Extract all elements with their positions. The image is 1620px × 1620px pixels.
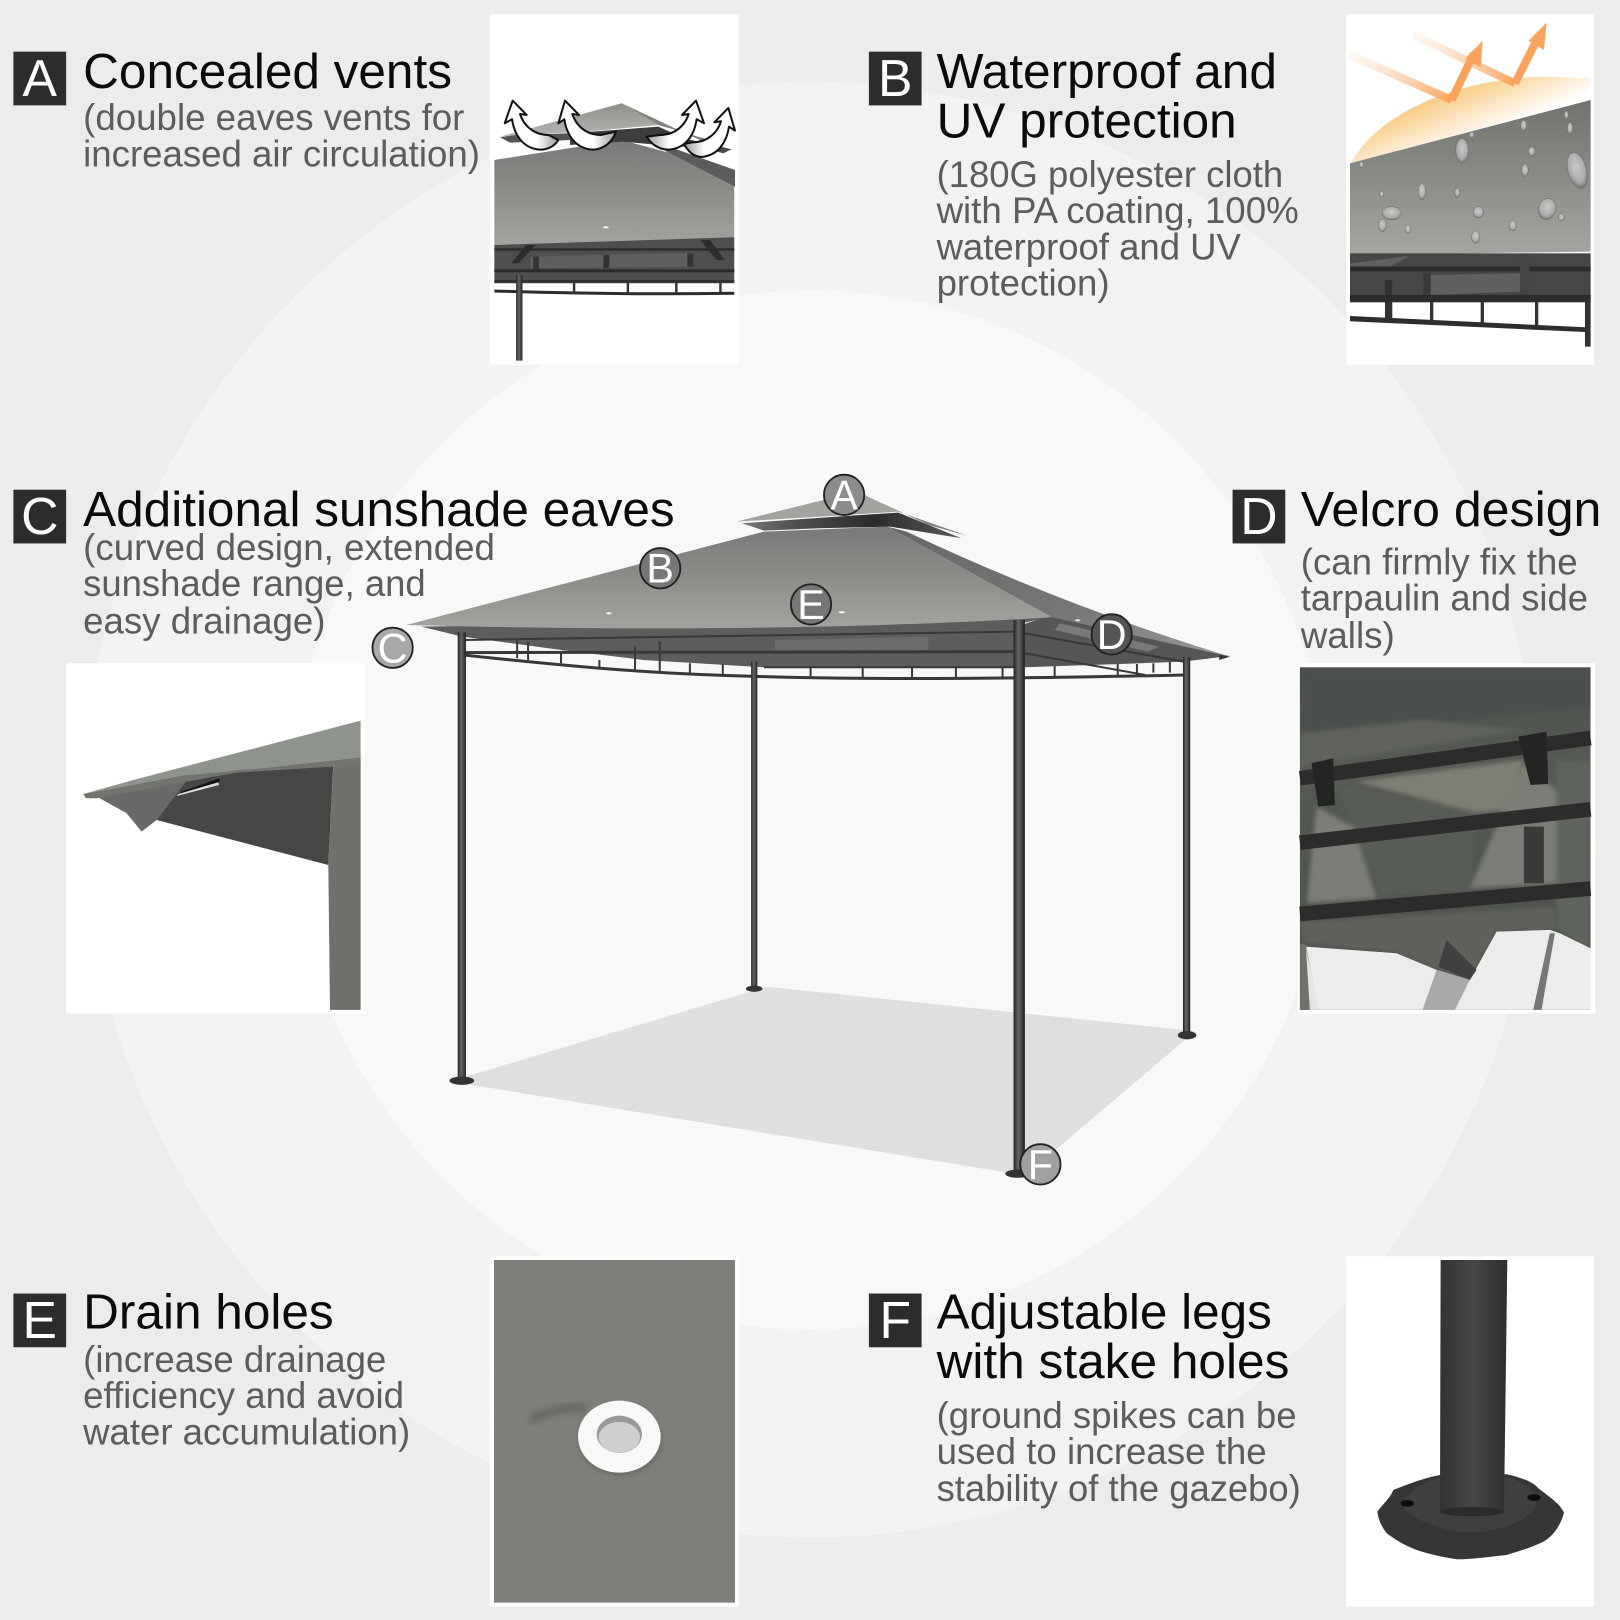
feature D: velcro design [1233, 481, 1601, 1014]
badge B: B [878, 49, 912, 107]
photo B: canopy with water drops and sun [1346, 14, 1594, 365]
description D: (can firmly fix the [1301, 540, 1578, 582]
heading E: Drain holes [83, 1284, 334, 1340]
callout marker A [824, 472, 864, 518]
badge C: C [21, 487, 58, 545]
heading C: Additional sunshade eaves [83, 481, 675, 537]
feature C: additional sunshade eaves [13, 481, 675, 1014]
description E: water accumulation) [82, 1410, 410, 1452]
description D: walls) [1300, 614, 1395, 656]
callout marker C: C [378, 625, 408, 671]
description B [936, 153, 1299, 303]
heading D: Velcro design [1301, 481, 1601, 537]
description A: increased air circulation) [83, 132, 480, 174]
callout marker F [1020, 1142, 1061, 1188]
callout marker B [640, 546, 680, 592]
leg: back centre [746, 661, 762, 992]
description D [1300, 540, 1588, 656]
description E: (increase drainage [83, 1338, 386, 1380]
description F: used to increase the [937, 1430, 1267, 1472]
heading B: UV protection [937, 92, 1237, 148]
badge F [869, 1291, 922, 1349]
description B: waterproof and UV [936, 225, 1241, 267]
description C: (curved design, extended [83, 526, 495, 568]
ground shadow [466, 987, 1195, 1173]
description A [83, 96, 480, 174]
main gazebo illustration [406, 492, 1230, 1178]
feature F: adjustable legs [869, 1256, 1594, 1607]
callout marker F: F [1028, 1142, 1053, 1188]
heading A: Concealed vents [83, 43, 452, 99]
badge F: F [879, 1291, 911, 1349]
heading F [936, 1284, 1289, 1389]
water drops [1359, 111, 1591, 243]
photo A: vents with arrows [490, 14, 739, 365]
description C: sunshade range, and [83, 562, 426, 604]
callout marker A: A [830, 472, 858, 518]
photo C: eave corner [66, 663, 365, 1014]
photo F: leg base plate [1346, 1256, 1594, 1607]
description F [937, 1394, 1301, 1509]
callout marker D: D [1097, 612, 1127, 658]
description E: efficiency and avoid [83, 1374, 404, 1416]
description F: (ground spikes can be [937, 1394, 1297, 1436]
description D: tarpaulin and side [1301, 577, 1588, 619]
lower frame rails [462, 632, 1184, 679]
feature B: waterproof and UV protection [869, 14, 1594, 365]
leg: front left [449, 632, 474, 1085]
description A: (double eaves vents for [83, 96, 464, 138]
heading F: Adjustable legs [937, 1284, 1272, 1340]
photo E: grommet [490, 1256, 739, 1607]
badge B [869, 49, 922, 107]
icon: reflected sun rays [1350, 35, 1539, 100]
callout marker E: E [797, 582, 825, 628]
badge E [13, 1291, 66, 1349]
heading B: Waterproof and [937, 43, 1277, 99]
description B: (180G polyester cloth [937, 153, 1283, 195]
callout marker E [791, 582, 831, 628]
upper vented roof [742, 513, 961, 538]
icon: airflow arrows [505, 101, 735, 157]
badge A [13, 49, 66, 107]
leg: right [1178, 657, 1196, 1039]
badge D: D [1240, 487, 1278, 545]
description C [83, 526, 495, 641]
description C: easy drainage) [83, 599, 325, 641]
feature A: concealed vents [13, 14, 739, 365]
badge A: A [23, 49, 58, 107]
badge E: E [23, 1291, 57, 1349]
description F: stability of the gazebo) [937, 1467, 1301, 1509]
callout marker B: B [646, 546, 674, 592]
gazebo canopy and frame [406, 492, 1230, 679]
description E [82, 1338, 410, 1452]
description B: protection) [937, 261, 1110, 303]
description B: with PA coating, 100% [936, 189, 1299, 231]
heading F: with stake holes [936, 1333, 1289, 1389]
leg: front right [1005, 620, 1030, 1178]
photo D: velcro straps on frame [1298, 663, 1595, 1014]
main roof [406, 527, 1052, 628]
heading B [937, 43, 1277, 148]
feature E: drain holes [13, 1256, 739, 1607]
